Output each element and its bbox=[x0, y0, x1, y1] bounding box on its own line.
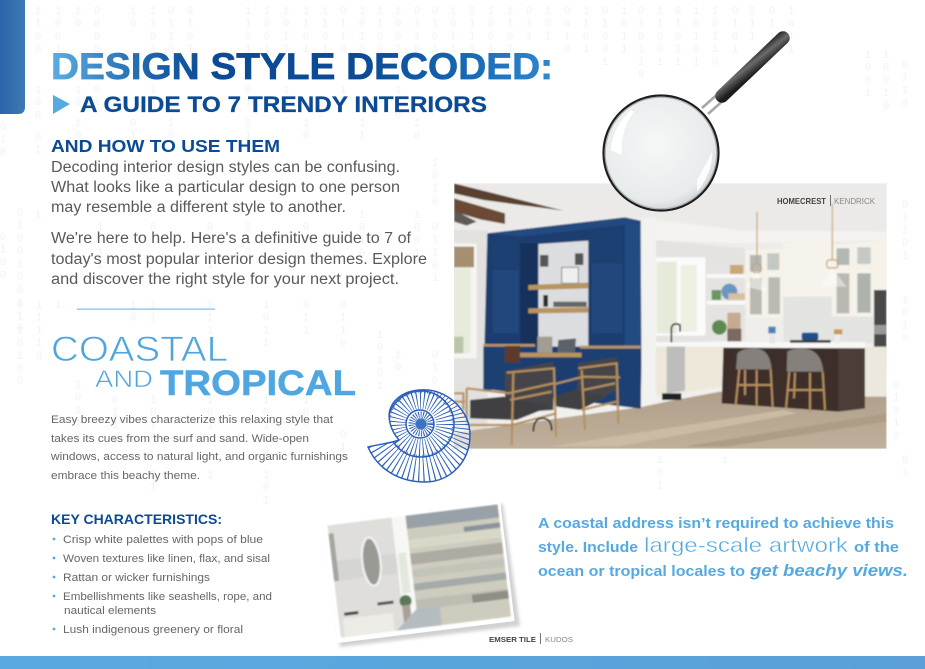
background binary pattern: 1101 bbox=[300, 6, 312, 57]
heading: coastal and tropical: TROPICAL bbox=[160, 364, 356, 403]
description text block bbox=[50, 414, 348, 482]
photo credit: emser tile kudos: KUDOS bbox=[545, 635, 573, 644]
background binary pattern: 01 bbox=[32, 132, 44, 157]
background binary pattern: 10 bbox=[127, 6, 139, 31]
background binary pattern: 10110 bbox=[260, 395, 272, 458]
background binary pattern: 01101 bbox=[899, 200, 911, 264]
background binary pattern: 11 bbox=[280, 85, 292, 110]
background binary pattern: 1 bbox=[719, 455, 731, 468]
background binary pattern: 0110 bbox=[109, 395, 121, 446]
key characteristics list bbox=[53, 534, 272, 636]
background binary pattern: 1010 bbox=[356, 6, 368, 57]
key characteristics list: Crisp white palettes with pops of blue bbox=[63, 534, 263, 546]
background binary pattern: 11001 bbox=[654, 6, 666, 70]
photo credit: emser tile kudos bbox=[489, 633, 573, 644]
background binary pattern: 101 bbox=[654, 455, 666, 493]
background binary pattern: 1101 bbox=[580, 6, 592, 57]
background binary pattern: 011 bbox=[746, 6, 758, 44]
icon: play arrow bbox=[53, 95, 70, 114]
background binary pattern: 10 bbox=[72, 118, 84, 143]
background binary pattern: 1 bbox=[204, 470, 216, 483]
background binary pattern: 1001 bbox=[52, 6, 64, 57]
background binary pattern: 10101 bbox=[690, 6, 702, 70]
background binary pattern: 1 bbox=[52, 300, 64, 313]
background binary pattern: 1011 bbox=[94, 222, 106, 273]
background binary pattern: 1010 bbox=[899, 295, 911, 346]
background binary pattern: 1100 bbox=[374, 6, 386, 57]
background binary pattern: 0101 bbox=[184, 6, 196, 57]
heading: coastal and tropical: COASTAL bbox=[51, 330, 228, 369]
background binary pattern: 1101 bbox=[504, 6, 516, 57]
background binary pattern: 01 bbox=[899, 455, 911, 480]
callout: get beachy views. bbox=[749, 561, 908, 580]
intro text block: What looks like a particular design to one person bbox=[51, 179, 400, 196]
background binary pattern: 0110 bbox=[337, 300, 349, 351]
background binary pattern: 1010 bbox=[356, 210, 368, 261]
background binary pattern: 10 bbox=[72, 6, 84, 31]
background binary pattern: 01011 bbox=[672, 6, 684, 70]
callout bbox=[538, 515, 908, 580]
background binary pattern: 10 bbox=[337, 85, 349, 110]
background binary pattern: 010 bbox=[242, 222, 254, 260]
background binary pattern: 1001 bbox=[411, 210, 423, 261]
background binary pattern: 01 bbox=[242, 118, 254, 143]
background binary pattern: 01 bbox=[242, 85, 254, 110]
background binary pattern: 011 bbox=[204, 300, 216, 338]
background binary pattern: 010 bbox=[429, 350, 441, 388]
background binary pattern: 01 bbox=[337, 430, 349, 455]
background binary pattern: 10 bbox=[165, 118, 177, 143]
background binary pattern: 10 bbox=[411, 118, 423, 143]
callout: ocean or tropical locales to bbox=[538, 563, 745, 580]
background binary pattern: 1001 bbox=[392, 6, 404, 57]
photo credit: homecrest kendrick: KENDRICK bbox=[834, 196, 875, 206]
background binary pattern: 1101 bbox=[319, 6, 331, 57]
key characteristics list: Lush indigenous greenery or floral bbox=[63, 624, 243, 636]
background binary pattern: 010110 bbox=[635, 6, 647, 82]
background binary pattern: 0110 bbox=[466, 6, 478, 57]
background binary pattern: 1001 bbox=[485, 6, 497, 57]
photo credit: emser tile kudos: EMSER TILE bbox=[489, 635, 536, 644]
background binary pattern: 010010 bbox=[14, 208, 26, 284]
background binary pattern: 0110 bbox=[899, 60, 911, 111]
title: DESIGN STYLE DECODED: bbox=[51, 46, 553, 87]
intro text block: may resemble a different style to another. bbox=[51, 199, 346, 216]
background binary pattern: 1101 bbox=[242, 6, 254, 57]
background binary pattern: 0110 bbox=[411, 6, 423, 57]
background binary pattern: 10 bbox=[300, 118, 312, 143]
background binary pattern: 0110 bbox=[766, 6, 778, 57]
background binary pattern: 1011 bbox=[447, 6, 459, 57]
bottom bar bbox=[0, 656, 925, 669]
background binary pattern: 11 bbox=[147, 300, 159, 325]
heading: coastal and tropical bbox=[51, 330, 356, 403]
background binary pattern: 0110 bbox=[14, 285, 26, 336]
background binary pattern bbox=[0, 6, 911, 508]
background binary pattern: 1100 bbox=[32, 6, 44, 57]
background binary pattern: 101 bbox=[204, 395, 216, 433]
background binary pattern: 011 bbox=[300, 300, 312, 338]
background binary pattern: 11 bbox=[356, 118, 368, 143]
heading: coastal and tropical: AND bbox=[95, 366, 153, 393]
background binary pattern: 01 bbox=[147, 222, 159, 247]
background binary pattern: 1001 bbox=[261, 6, 273, 57]
background binary pattern: 10101 bbox=[374, 330, 386, 394]
intro text block: today's most popular interior design themes. Explore bbox=[51, 251, 427, 268]
background binary pattern: 0101 bbox=[429, 6, 441, 57]
subtitle bbox=[53, 92, 487, 117]
background binary pattern: 0000 bbox=[91, 6, 103, 57]
background binary pattern: 10110 bbox=[72, 380, 84, 444]
background binary pattern: 0110 bbox=[165, 6, 177, 57]
intro text block: Decoding interior design styles can be confusing. bbox=[51, 159, 400, 176]
callout: A coastal address isn’t required to achieve this bbox=[538, 515, 894, 532]
background binary pattern: 01001 bbox=[599, 6, 611, 70]
background binary pattern: 1001 bbox=[300, 395, 312, 446]
background binary pattern: 10 bbox=[127, 300, 139, 325]
background binary pattern: 101 bbox=[260, 470, 272, 508]
background binary pattern: 101 bbox=[542, 6, 554, 44]
background binary pattern: 01 bbox=[147, 470, 159, 495]
background binary pattern: 11110 bbox=[33, 300, 45, 364]
background binary pattern: 01101 bbox=[429, 222, 441, 286]
background binary pattern: 10010 bbox=[880, 50, 892, 114]
key characteristics list: nautical elements bbox=[64, 605, 156, 617]
background binary pattern: 100 bbox=[32, 85, 44, 123]
description text block: Easy breezy vibes characterize this relaxing style that bbox=[51, 414, 334, 426]
background binary pattern: 10 bbox=[392, 350, 404, 375]
photo: tilted bathroom tile snapshot bbox=[323, 500, 520, 647]
background binary pattern: 1010 bbox=[429, 158, 441, 209]
intro text block bbox=[51, 159, 427, 288]
subtitle text: A GUIDE TO 7 TRENDY INTERIORS bbox=[80, 92, 487, 117]
background binary pattern: 110 bbox=[392, 85, 404, 123]
background binary pattern: 1011 bbox=[785, 6, 797, 57]
intro text block: We're here to help. Here's a definitive guide to 7 of bbox=[51, 230, 412, 247]
background binary pattern: 1011 bbox=[280, 6, 292, 57]
background binary pattern: 0101 bbox=[204, 222, 216, 273]
photo credit: homecrest kendrick bbox=[777, 195, 875, 206]
description text block: takes its cues from the surf and sand. Wide-open bbox=[51, 433, 309, 445]
callout: style. Include bbox=[538, 539, 638, 556]
background binary pattern: 0110 bbox=[337, 6, 349, 57]
heading: key characteristics: KEY CHARACTERISTICS: bbox=[51, 511, 222, 527]
background binary pattern: 1 bbox=[32, 210, 44, 223]
magnifier lens bbox=[604, 96, 718, 210]
magnifier handle bbox=[702, 38, 783, 114]
photo: kitchen with blue cabinetry bbox=[450, 180, 900, 453]
key characteristics list: Rattan or wicker furnishings bbox=[63, 572, 210, 584]
background binary pattern: 10 bbox=[72, 85, 84, 110]
background binary pattern: 0110100 bbox=[14, 300, 26, 389]
background binary pattern: 01 bbox=[300, 222, 312, 247]
intro text block: and discover the right style for your next project. bbox=[51, 271, 399, 288]
corner tab bbox=[0, 0, 25, 114]
background binary pattern: 011 bbox=[523, 6, 535, 44]
callout: of the bbox=[854, 539, 899, 556]
background binary pattern: 1101 bbox=[147, 6, 159, 57]
background binary pattern: 01 bbox=[91, 85, 103, 110]
description text block: embrace this beachy theme. bbox=[51, 470, 200, 482]
background binary pattern: 1010 bbox=[147, 395, 159, 446]
background binary pattern: 1011 bbox=[260, 300, 272, 351]
background binary pattern: 01010 bbox=[890, 380, 902, 444]
background binary pattern: 1001 bbox=[862, 50, 874, 101]
photo credit: homecrest kendrick: HOMECREST bbox=[777, 196, 827, 206]
background binary pattern: 11 bbox=[147, 85, 159, 110]
heading: and how to use them: AND HOW TO USE THEM bbox=[51, 136, 280, 156]
background binary pattern: 0010 bbox=[561, 6, 573, 57]
description text block: windows, access to natural light, and organic furnishings bbox=[50, 451, 348, 463]
background binary pattern: 01 bbox=[127, 118, 139, 143]
callout: large-scale artwork bbox=[644, 534, 849, 557]
key characteristics list: Embellishments like seashells, rope, and bbox=[63, 591, 272, 603]
background binary pattern: 10110 bbox=[709, 6, 721, 70]
background binary pattern: 0101 bbox=[729, 6, 741, 57]
background binary pattern: 1011 bbox=[618, 6, 630, 57]
key characteristics list: Woven textures like linen, flax, and sisal bbox=[63, 553, 270, 565]
icon: nautilus shell bbox=[367, 389, 471, 483]
icon: magnifying glass bbox=[604, 38, 783, 210]
